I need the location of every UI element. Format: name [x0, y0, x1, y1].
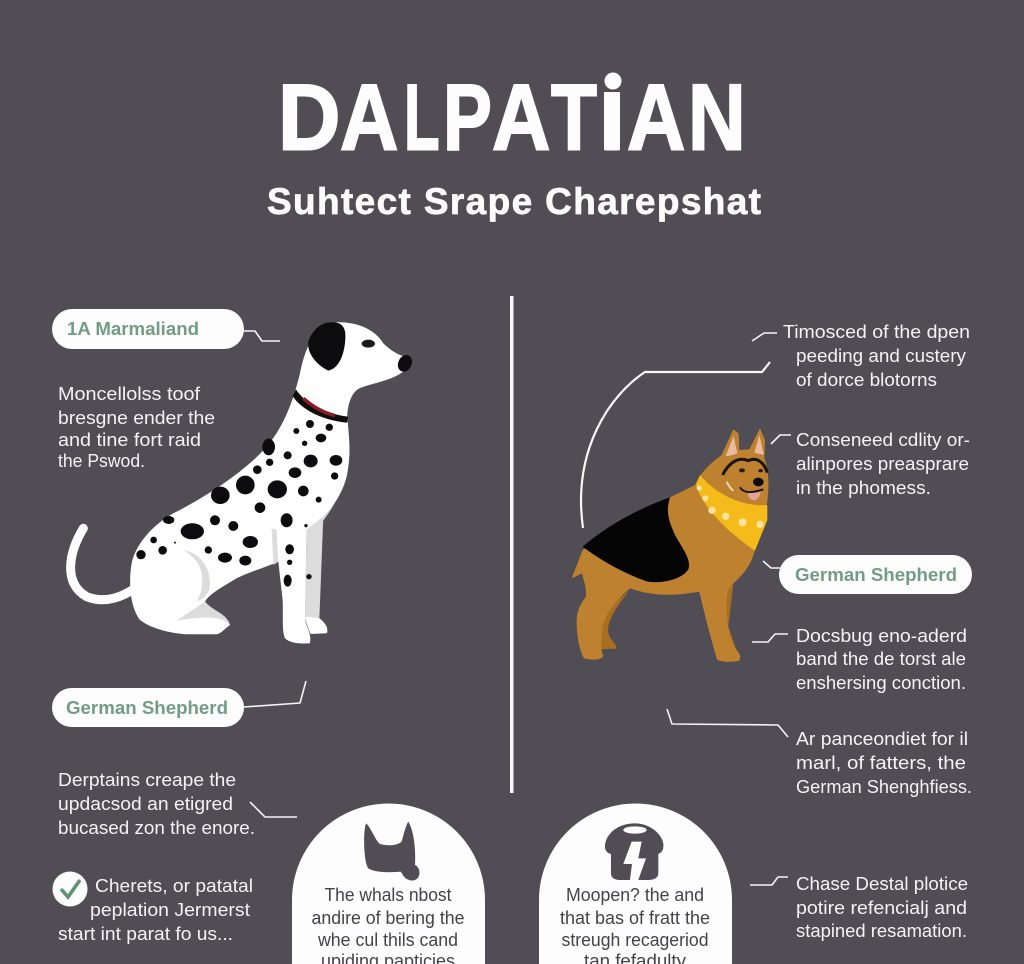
title: L [404, 64, 440, 170]
title: i [599, 64, 625, 170]
arch text: Moopen? the and [566, 885, 704, 905]
text block: right fifth: potire refencialj and [796, 897, 967, 918]
text block: left middle: Derptains creape the [58, 769, 236, 790]
illustration: German Shepherd [572, 428, 768, 662]
illustration: Dalmatian [71, 322, 415, 644]
connector [250, 802, 297, 817]
text block: left middle: updacsod an etigred [58, 793, 233, 814]
text block: right top: of dorce blotorns [796, 369, 937, 390]
tongue [748, 492, 761, 500]
ear [308, 322, 345, 371]
text block: left upper: the Pswod. [58, 450, 145, 471]
mouth [740, 487, 763, 492]
connector [667, 709, 788, 737]
text block: right second [796, 429, 970, 498]
title: D [278, 65, 340, 170]
text block: right third [796, 625, 967, 693]
center divider [510, 296, 514, 793]
nose [753, 478, 764, 486]
pill: German Shepherd right: German Shepherd [795, 565, 957, 585]
text block: right fifth: stapined resamation. [796, 920, 967, 941]
arch text [560, 885, 710, 964]
arch text: andire of bering the [312, 908, 464, 928]
pill: German Shepherd left: German Shepherd [66, 698, 228, 718]
title: A [340, 65, 398, 170]
icon: dog head [364, 822, 419, 880]
subtitle: Suhtect Srape Charepshat [267, 181, 761, 222]
connector [244, 681, 306, 707]
pill: German Shepherd left [52, 688, 244, 727]
title: N [688, 65, 746, 170]
icon: check badge [52, 872, 88, 906]
text block: right fifth: Chase Destal plotice [796, 873, 968, 894]
collar [293, 389, 348, 423]
text block: left upper: bresgne ender the [58, 407, 215, 428]
title: P [443, 65, 492, 170]
text block: right third: enshersing conction. [796, 672, 966, 693]
text block: right second: in the phomess. [796, 477, 931, 498]
arch text: The whals nbost [324, 885, 452, 905]
connector [243, 331, 280, 341]
bandana [696, 475, 767, 551]
text block: right top [783, 321, 970, 390]
text block: right fourth [796, 728, 972, 797]
text block: left lower: start int parat fo us... [58, 923, 233, 944]
nose [395, 353, 415, 374]
pill: 1A Marmalland [52, 309, 244, 349]
body [572, 428, 768, 662]
text block: right second: Conseneed cdlity or- [796, 429, 970, 450]
text block: right top: peeding and custery [796, 345, 967, 366]
connector [763, 561, 780, 568]
icon: mushroom with bolt [605, 823, 663, 880]
connector [752, 333, 777, 341]
arch text: whe cul thils cand [317, 930, 458, 950]
text block: left lower [58, 875, 253, 944]
spots [136, 420, 342, 587]
text block: right fourth: Ar panceondiet for il [796, 728, 968, 749]
title: A [492, 65, 550, 170]
title: T [551, 66, 597, 170]
connector [750, 877, 788, 885]
arch text [312, 885, 464, 964]
arc connector [581, 362, 770, 528]
text block: left upper: Moncellolss toof [58, 383, 201, 404]
text block: right third: Docsbug eno-aderd [796, 625, 967, 646]
brow [723, 459, 767, 475]
panel: left arch [292, 804, 485, 964]
text block: right second: alinpores preasprare [796, 453, 969, 474]
text block: left lower: Cherets, or patatal [95, 875, 253, 896]
arch text: streugh recageriod [562, 930, 708, 950]
text block: left lower: peplation Jermerst [90, 899, 250, 920]
title [282, 72, 742, 151]
title: A [627, 65, 685, 170]
connector [771, 435, 791, 444]
eyes [739, 468, 763, 472]
pill: 1A Marmalland: 1A Marmaliand [67, 319, 199, 339]
ears inner [726, 436, 737, 456]
text block: right top: Timosced of the dpen [783, 321, 970, 342]
text block: left upper [58, 383, 215, 471]
connector [752, 634, 788, 642]
text block: left upper: and tine fort raid [58, 429, 201, 450]
panel: right arch [539, 804, 732, 964]
text block: left middle [58, 769, 255, 838]
text block: right fourth: marl, of fatters, the [796, 752, 966, 773]
pill: German Shepherd right [779, 555, 972, 594]
text block: right third: band the de torst ale [796, 648, 966, 669]
text block: right fifth [796, 873, 968, 941]
far legs [594, 583, 737, 650]
text block: left middle: bucased zon the enore. [58, 817, 255, 838]
text block: right fourth: German Shenghfiess. [796, 776, 972, 797]
saddle [583, 497, 689, 582]
arch text: that bas of fratt the [560, 908, 710, 928]
eye [362, 340, 375, 348]
